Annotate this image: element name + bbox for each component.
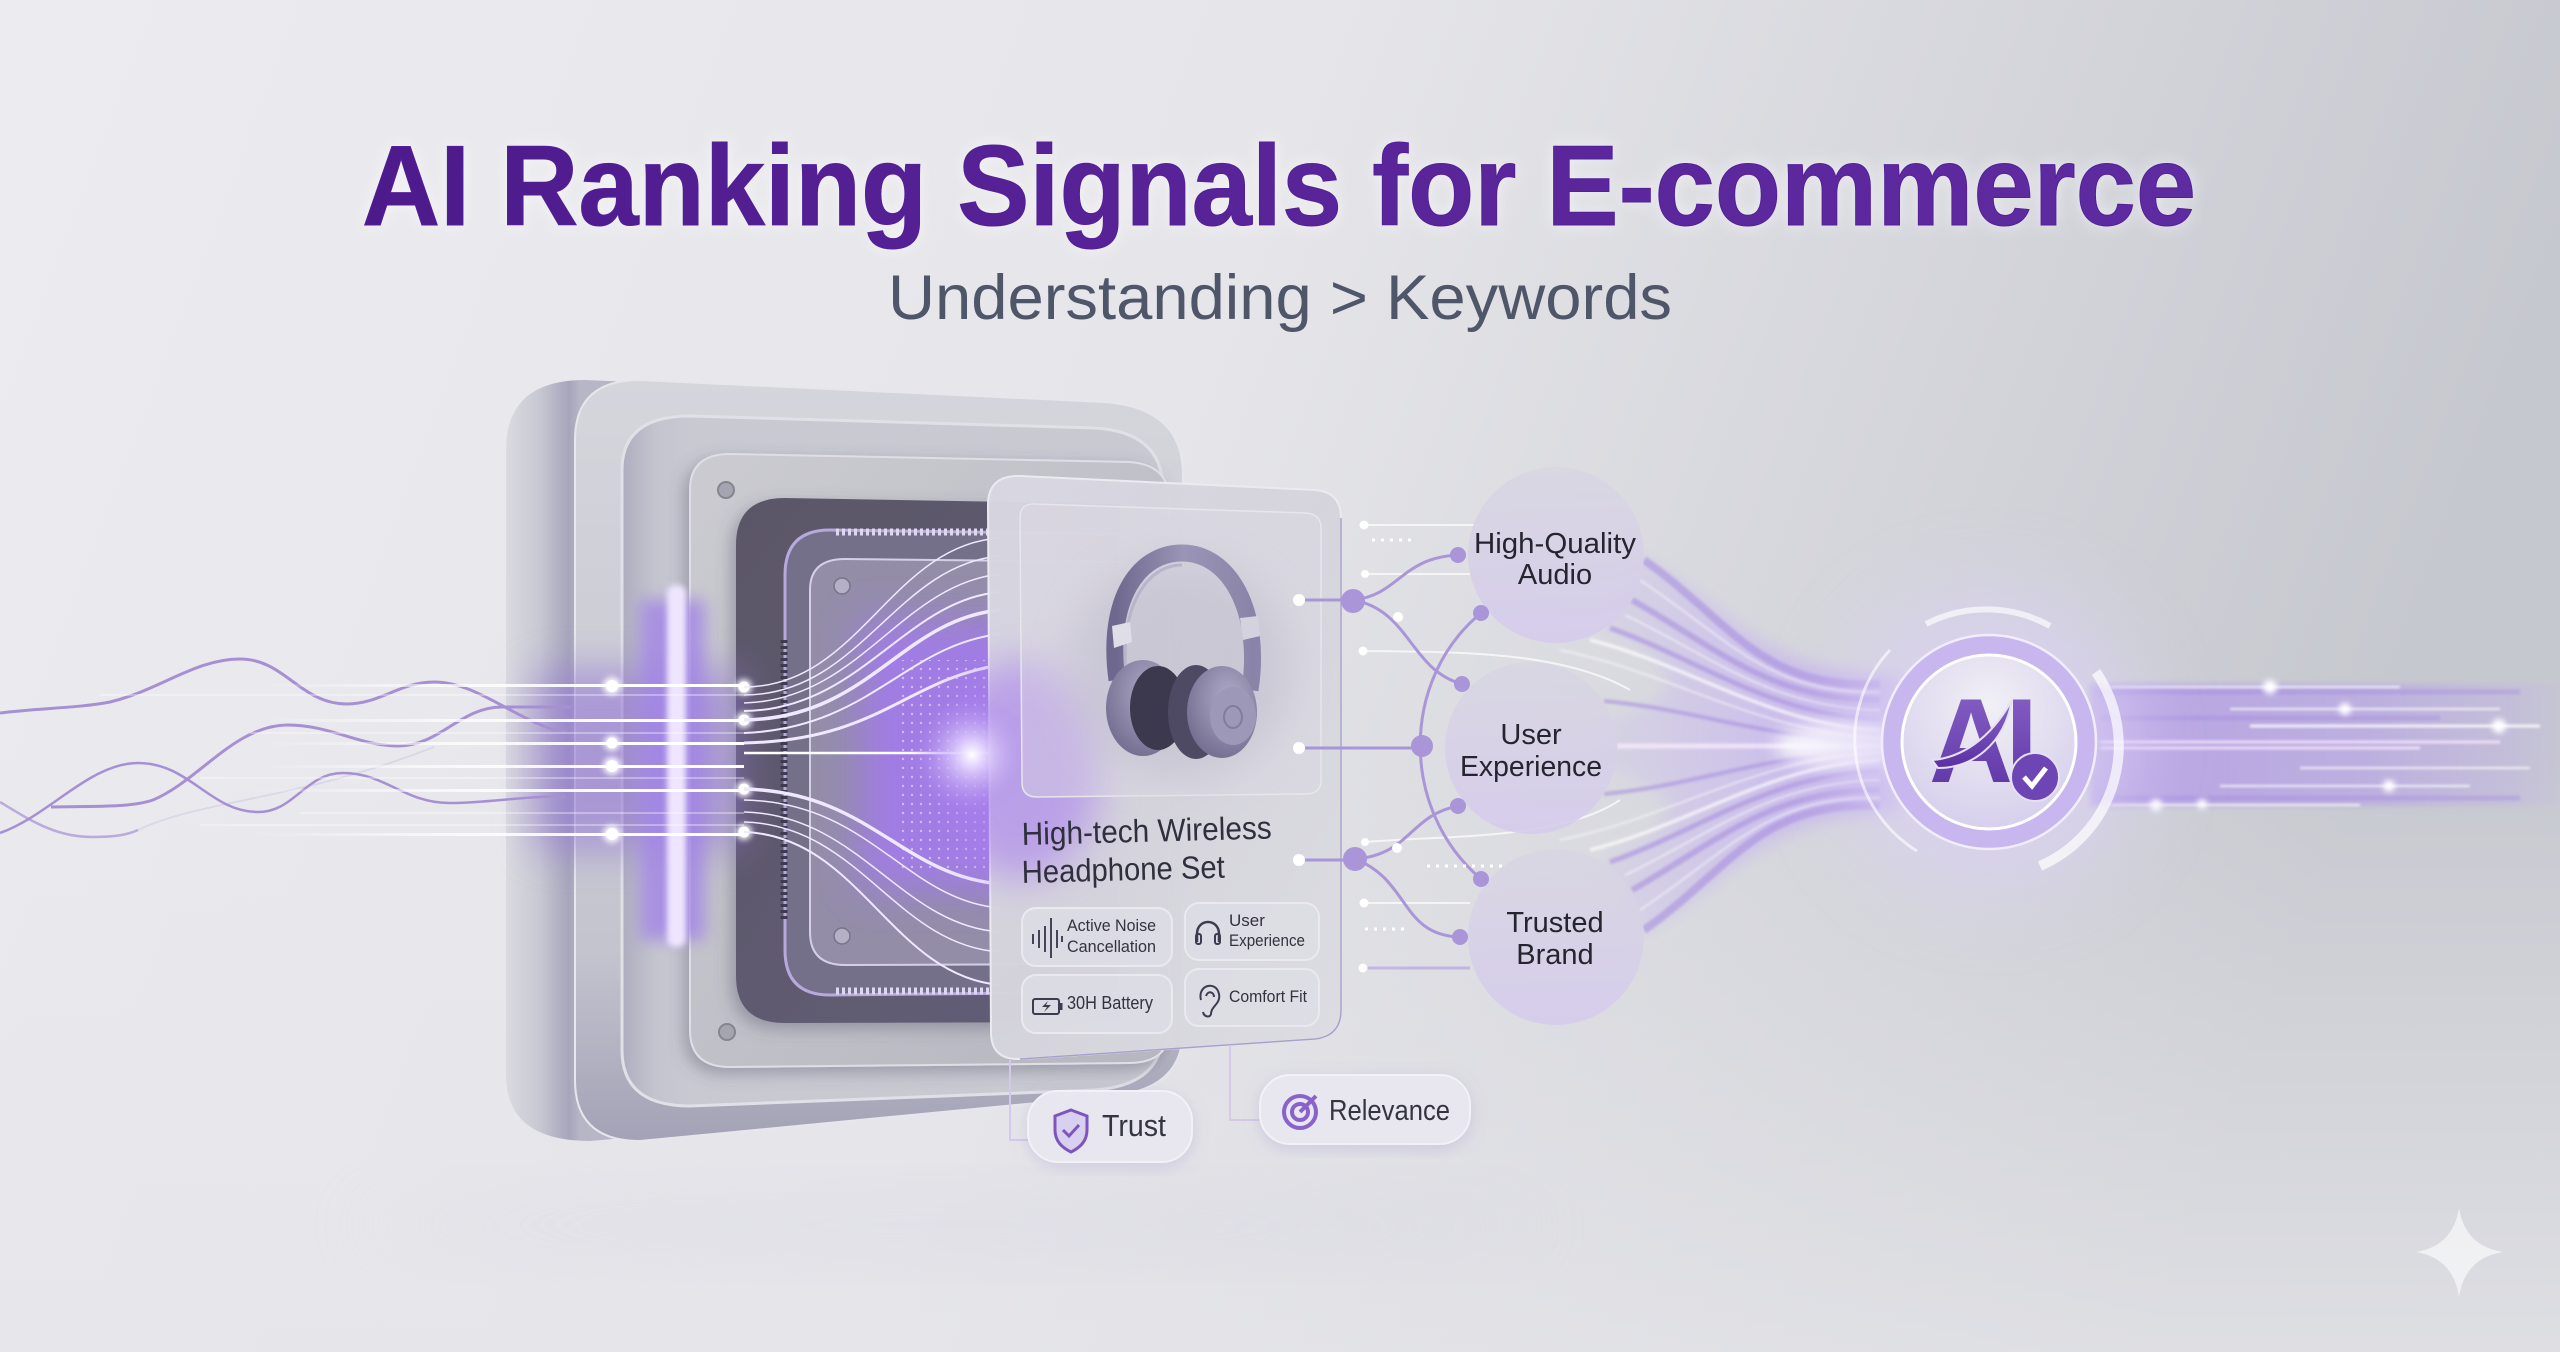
device back shell	[506, 380, 1183, 1141]
dotted traces	[1365, 540, 1505, 929]
icon: target	[1284, 1096, 1316, 1128]
lavender band across frame	[535, 670, 740, 850]
AI emblem	[1839, 592, 2139, 892]
icon: shield	[1055, 1110, 1087, 1152]
outer arcs	[1855, 609, 2119, 866]
dark chip	[736, 498, 1120, 1023]
chip: active noise cancellation	[1022, 908, 1172, 966]
curved streams into chip	[744, 538, 1000, 985]
left node dots	[603, 677, 752, 843]
circle: trusted brand: Brand	[1516, 939, 1594, 971]
product card	[912, 476, 1341, 1059]
title: AI Ranking Signals for E-commerce	[362, 123, 2196, 250]
icon: headphones	[1106, 553, 1260, 759]
icon: check badge	[2011, 753, 2059, 801]
inner chip	[785, 530, 1120, 995]
circle: high-quality audio	[1468, 467, 1644, 643]
chip: 30H battery: 30H Battery	[1067, 993, 1153, 1013]
chip: active noise cancellation: Cancellation	[1067, 937, 1156, 956]
product name	[1021, 809, 1272, 890]
subtitle: Understanding > Keywords	[888, 263, 1672, 333]
glass die	[810, 559, 1120, 965]
chip: active noise cancellation: Active Noise	[1067, 916, 1156, 935]
pill: relevance: Relevance	[1329, 1095, 1450, 1127]
device front face	[575, 380, 1183, 1141]
title: AI Ranking Signals for E-commerce	[362, 123, 2196, 250]
funnel beam to AI	[1560, 555, 1915, 935]
AI mark: A	[1929, 674, 2013, 808]
inner disc	[1902, 655, 2076, 829]
horizontal light lines	[100, 677, 752, 843]
signal network	[1293, 520, 1505, 972]
chip: comfort fit	[1185, 969, 1319, 1026]
chip: comfort fit: Comfort Fit	[1229, 987, 1307, 1006]
circle: user experience: Experience	[1460, 751, 1602, 783]
circle: user experience: User	[1500, 719, 1562, 751]
chip pins	[784, 532, 990, 991]
image panel	[1020, 504, 1321, 797]
pill: relevance	[1260, 1075, 1470, 1144]
brushed metal plate	[690, 454, 1169, 1067]
chip: user experience	[1185, 903, 1319, 960]
circle: high-quality audio: High-Quality	[1474, 528, 1637, 560]
die screws	[834, 578, 850, 944]
circle: high-quality audio: Audio	[1518, 559, 1592, 591]
ring	[1882, 635, 2096, 849]
card glow	[940, 660, 1100, 880]
card output dots	[1293, 520, 1403, 972]
card glass	[988, 476, 1341, 1059]
circle: trusted brand	[1468, 849, 1644, 1025]
chip: user experience: User	[1229, 911, 1265, 930]
product name: Headphone Set	[1021, 849, 1225, 890]
output beam	[2090, 680, 2560, 811]
chip: user experience: Experience	[1229, 931, 1305, 950]
chip device	[506, 380, 1183, 1141]
device inner frame	[622, 416, 1163, 1106]
purple glow core	[860, 620, 1120, 890]
plate screws	[718, 482, 735, 1040]
signal circles	[1445, 467, 1644, 1025]
network nodes	[1341, 547, 1489, 945]
product name: High-tech Wireless	[1021, 809, 1272, 852]
pill: trust	[1028, 1091, 1192, 1162]
circle: trusted brand: Trusted	[1506, 907, 1604, 939]
circle: user experience	[1445, 662, 1617, 834]
AI mark: I	[2005, 674, 2038, 808]
glowing strip	[667, 585, 686, 947]
incoming waves	[0, 659, 571, 837]
chip: 30H battery	[1022, 975, 1172, 1033]
side glow on frame	[640, 600, 705, 940]
connectors to pills	[1010, 1045, 1262, 1140]
faint output lines from card	[1363, 525, 1630, 968]
pill: trust: Trust	[1102, 1108, 1166, 1143]
sparkles	[2150, 680, 2506, 811]
icon: sparkle watermark	[2416, 1208, 2503, 1297]
